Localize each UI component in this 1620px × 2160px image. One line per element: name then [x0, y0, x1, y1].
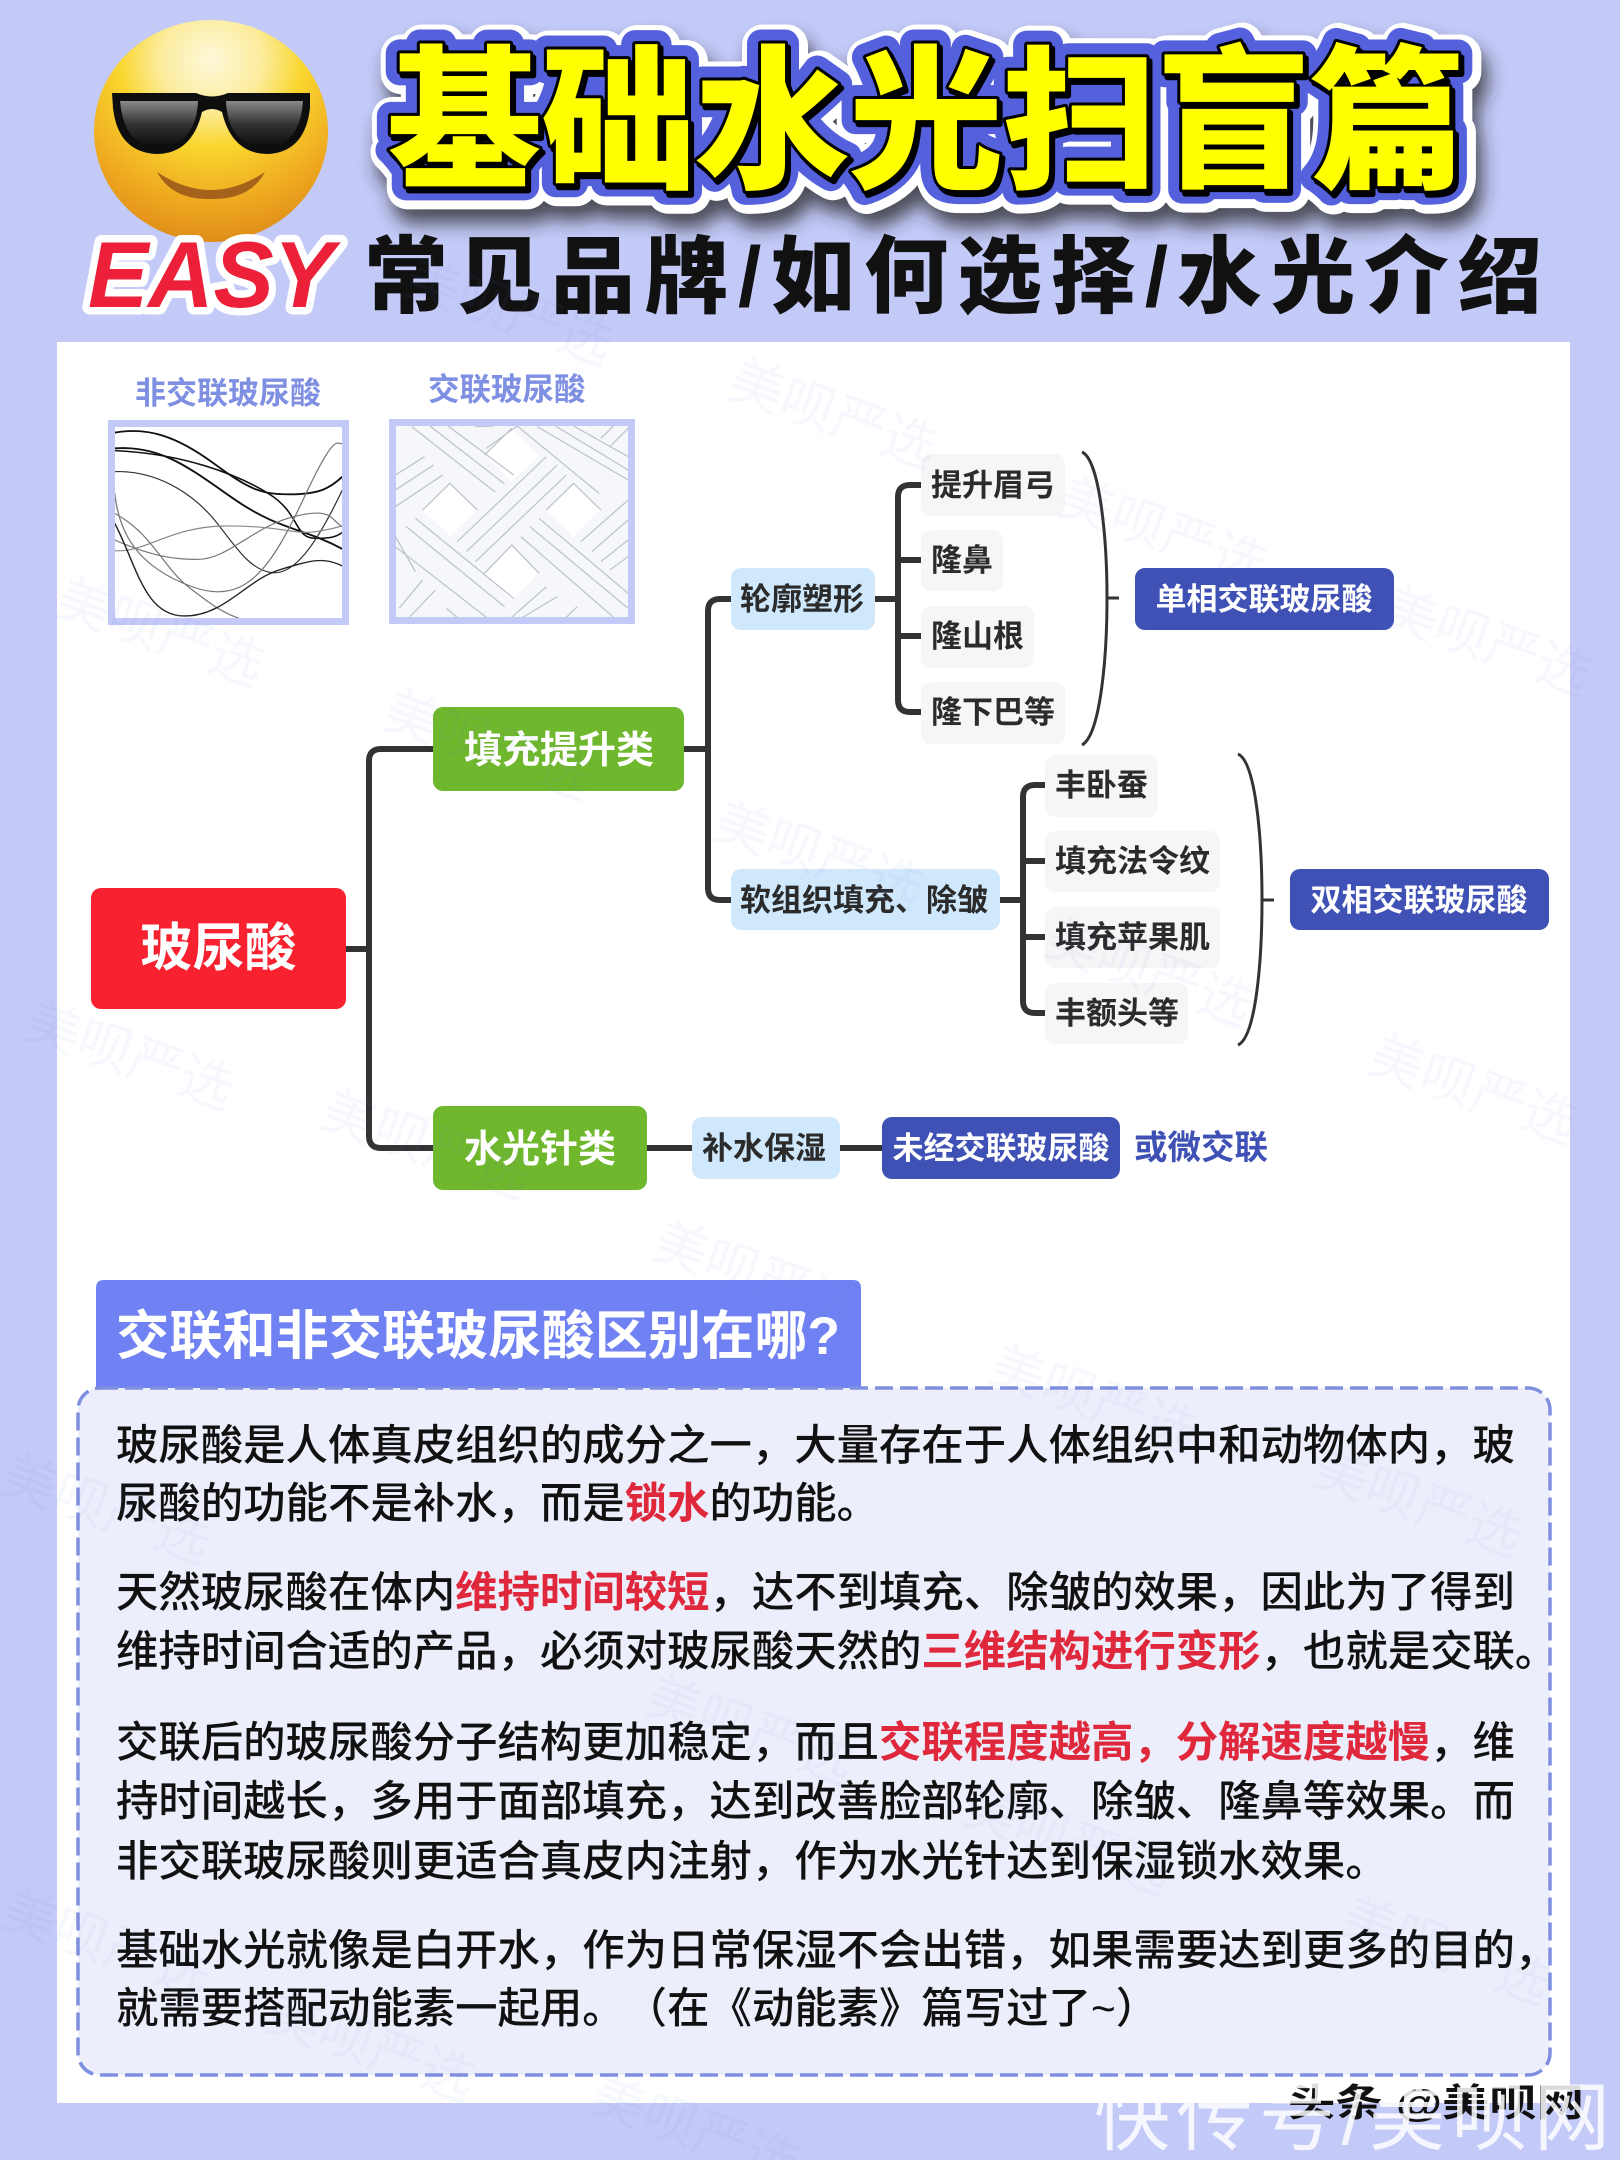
credit: toutiao handle: 头条 @美呗网 — [1288, 2083, 1584, 2125]
paragraph 4: 基础水光就像是白开水，作为日常保湿不会出错，如果需要达到更多的目的， — [116, 1927, 1557, 1974]
watermarks: 美呗严选 — [1375, 577, 1599, 707]
tag: single-phase crosslinked — [1135, 568, 1394, 630]
paragraph 2: 天然玻尿酸在体内维持时间较短，达不到填充、除皱的效果，因此为了得到 — [116, 1569, 1515, 1616]
watermarks: 美呗严选 — [707, 791, 931, 921]
leaf: brow lift: 提升眉弓 — [931, 468, 1055, 503]
watermarks: 美呗严选 — [645, 1211, 869, 1341]
credit: kuaichuanhao overlay: 快传号/美呗网 — [1094, 2076, 1610, 2160]
heading tab: 交联和非交联玻尿酸区别在哪? — [116, 1307, 840, 1366]
leaf: chin — [921, 682, 1065, 744]
panel: white content card — [57, 342, 1570, 2103]
watermarks: 美呗严选 — [397, 247, 621, 377]
watermarks: 美呗严选 — [955, 1776, 1179, 1906]
paragraph 3: 非交联玻尿酸则更适合真皮内注射，作为水光针达到保湿锁水效果。 — [116, 1838, 1388, 1885]
node: hydro needle — [433, 1106, 647, 1190]
title: 基础水光扫盲篇 — [395, 52, 1473, 225]
tag: biphasic crosslinked: 双相交联玻尿酸 — [1310, 883, 1528, 918]
node: hyaluronic acid root: 玻尿酸 — [140, 920, 297, 978]
node: soft tissue filling — [731, 869, 1000, 930]
title: 基础水光扫盲篇 — [390, 40, 1468, 213]
tag: non-crosslinked — [882, 1117, 1120, 1179]
title: 基础水光扫盲篇 — [387, 36, 1465, 209]
node: filling and lifting — [433, 707, 684, 791]
watermarks: 美呗严选 — [259, 1983, 483, 2113]
tag: biphasic crosslinked — [1290, 869, 1549, 930]
leaf: apple cheeks: 填充苹果肌 — [1055, 920, 1210, 955]
watermarks: 美呗严选 — [1051, 467, 1275, 597]
leaf: tear trough — [1045, 755, 1158, 817]
subtitle: 常见品牌/如何选择/水光介绍 — [364, 230, 1542, 324]
tag: non-crosslinked: 未经交联玻尿酸 — [892, 1131, 1110, 1166]
leaf: forehead — [1045, 983, 1188, 1044]
paragraph 2: 维持时间合适的产品，必须对玻尿酸天然的三维结构进行变形，也就是交联。 — [116, 1628, 1557, 1675]
watermarks: 美呗严选 — [376, 681, 600, 811]
leaf: nasal root — [921, 606, 1034, 668]
node: filling and lifting: 填充提升类 — [464, 730, 654, 772]
leaf: nose: 隆鼻 — [931, 543, 993, 578]
connector lines: mind map — [346, 485, 1045, 1148]
note: or micro crosslinked: 或微交联 — [1134, 1130, 1268, 1167]
tag: single-phase crosslinked: 单相交联玻尿酸 — [1156, 582, 1372, 617]
icon: sunglasses emoji — [94, 20, 328, 242]
paragraph 2 — [116, 1569, 1557, 1675]
title: 基础水光扫盲篇 — [387, 36, 1465, 209]
watermarks: 美呗严选 — [0, 1445, 218, 1575]
watermarks: 美呗严选 — [638, 1666, 862, 1796]
watermarks: 美呗严选 — [1306, 1438, 1530, 1568]
paragraph 3 — [116, 1719, 1515, 1885]
watermarks: 美呗严选 — [1361, 1025, 1585, 1155]
node: hydration — [692, 1117, 840, 1179]
node: hydro needle: 水光针类 — [464, 1129, 616, 1171]
label: non-crosslinked: 非交联玻尿酸 — [135, 376, 321, 411]
watermarks: 美呗严选 — [314, 1080, 538, 1210]
paragraph 3: 持时间越长，多用于面部填充，达到改善脸部轮廓、除皱、隆鼻等效果。而 — [116, 1778, 1515, 1825]
node: hydration: 补水保湿 — [702, 1131, 826, 1166]
image: non-crosslinked strands — [112, 424, 346, 622]
watermarks: 美呗严选 — [721, 350, 945, 480]
paragraph 1: 尿酸的功能不是补水，而是锁水的功能。 — [116, 1480, 879, 1527]
title: 基础水光扫盲篇 — [389, 38, 1467, 211]
watermarks: 美呗严选 — [18, 991, 242, 1121]
watermarks: 美呗严选 — [48, 568, 272, 698]
leaf: chin: 隆下巴等 — [931, 695, 1055, 730]
paragraph 4: 就需要搭配动能素一起用。（在《动能素》篇写过了~） — [116, 1985, 1158, 2032]
paragraph 1 — [116, 1422, 1515, 1527]
heading tab — [96, 1280, 861, 1392]
paragraph 4 — [116, 1927, 1557, 2032]
bracket: single-phase group — [1082, 452, 1119, 745]
leaf: nasolabial — [1045, 831, 1220, 892]
EASY label: EASY — [88, 222, 341, 327]
watermarks: 美呗严选 — [1334, 1886, 1558, 2016]
leaf: nose — [921, 530, 1003, 591]
image: crosslinked woven pattern — [392, 422, 632, 620]
leaf: forehead: 丰额头等 — [1055, 996, 1179, 1031]
node: contouring: 轮廓塑形 — [740, 582, 864, 617]
node: hyaluronic acid root — [91, 888, 346, 1009]
node: contouring — [731, 568, 875, 630]
panel: explanation text — [78, 1388, 1557, 2075]
paragraph 1: 玻尿酸是人体真皮组织的成分之一，大量存在于人体组织中和动物体内，玻 — [116, 1422, 1515, 1469]
leaf: apple cheeks — [1045, 907, 1220, 968]
bracket: biphasic group — [1238, 754, 1274, 1045]
title: 基础水光扫盲篇 — [387, 36, 1465, 209]
watermarks: 美呗严选 — [0, 1880, 218, 2010]
watermarks: 美呗严选 — [982, 1335, 1206, 1465]
leaf: brow lift — [921, 454, 1065, 516]
paragraph 3: 交联后的玻尿酸分子结构更加稳定，而且交联程度越高，分解速度越慢，维 — [116, 1719, 1515, 1766]
label: crosslinked: 交联玻尿酸 — [428, 371, 586, 407]
node: soft tissue filling: 软组织填充、除皱 — [740, 883, 988, 918]
leaf: nasolabial: 填充法令纹 — [1055, 844, 1210, 879]
leaf: nasal root: 隆山根 — [931, 619, 1024, 654]
watermarks: 美呗严选 — [1037, 908, 1261, 1038]
leaf: tear trough: 丰卧蚕 — [1055, 768, 1148, 803]
